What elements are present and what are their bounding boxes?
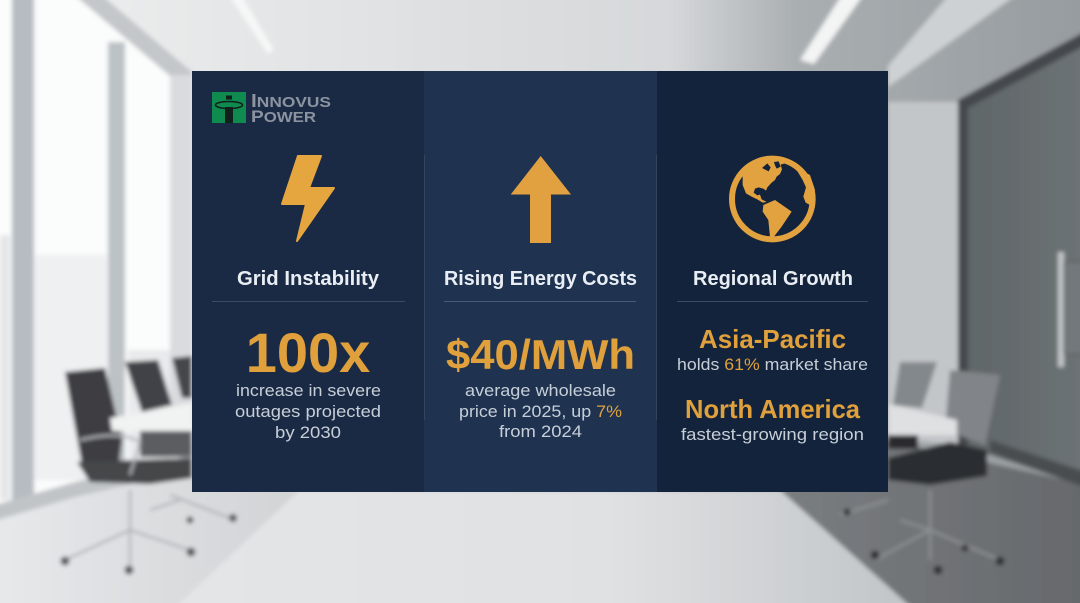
region stat: Asia-Pacific [677, 324, 868, 374]
heading: Grid Instability [237, 268, 380, 290]
description: by 2030 [275, 423, 341, 442]
description: from 2024 [499, 422, 582, 441]
icon: globe [732, 158, 815, 239]
logo wordmark: INNOVUS [251, 91, 331, 111]
panel: grid instability [212, 156, 405, 442]
description: outages projected [235, 402, 381, 421]
heading: Regional Growth [693, 268, 853, 290]
logo mark [212, 92, 246, 123]
description [235, 381, 381, 442]
region stat: Asia-Pacific: Asia-Pacific [699, 324, 846, 354]
icon: up arrow [511, 156, 571, 243]
column backgrounds [192, 71, 888, 492]
description: price in 2025, up 7% [459, 402, 622, 421]
region stat: North America: fastest-growing region [681, 425, 864, 444]
ceiling light strips [212, 0, 1023, 87]
heading: Rising Energy Costs [444, 268, 637, 290]
description: average wholesale [465, 381, 616, 400]
panel: rising energy costs [444, 156, 637, 441]
region stat: North America: North America [685, 394, 861, 424]
stat: 100x [246, 321, 370, 384]
right chairs and table [840, 362, 1004, 574]
description: increase in severe [236, 381, 381, 400]
description [459, 381, 622, 441]
logo: Innovus Power: POWER [251, 107, 316, 126]
region stat: Asia-Pacific: holds 61% market share [677, 355, 868, 374]
infographic card [192, 71, 888, 492]
region stat: North America [681, 394, 864, 444]
logo: Innovus Power [212, 91, 331, 126]
panel: regional growth [677, 158, 868, 444]
icon: lightning bolt [282, 156, 334, 241]
floor [0, 440, 1080, 603]
foreground table [148, 490, 940, 603]
stat: $40/MWh [446, 331, 635, 378]
right wall and glass partition [888, 18, 1080, 497]
left chairs and table [60, 356, 237, 574]
left window wall [0, 0, 192, 528]
